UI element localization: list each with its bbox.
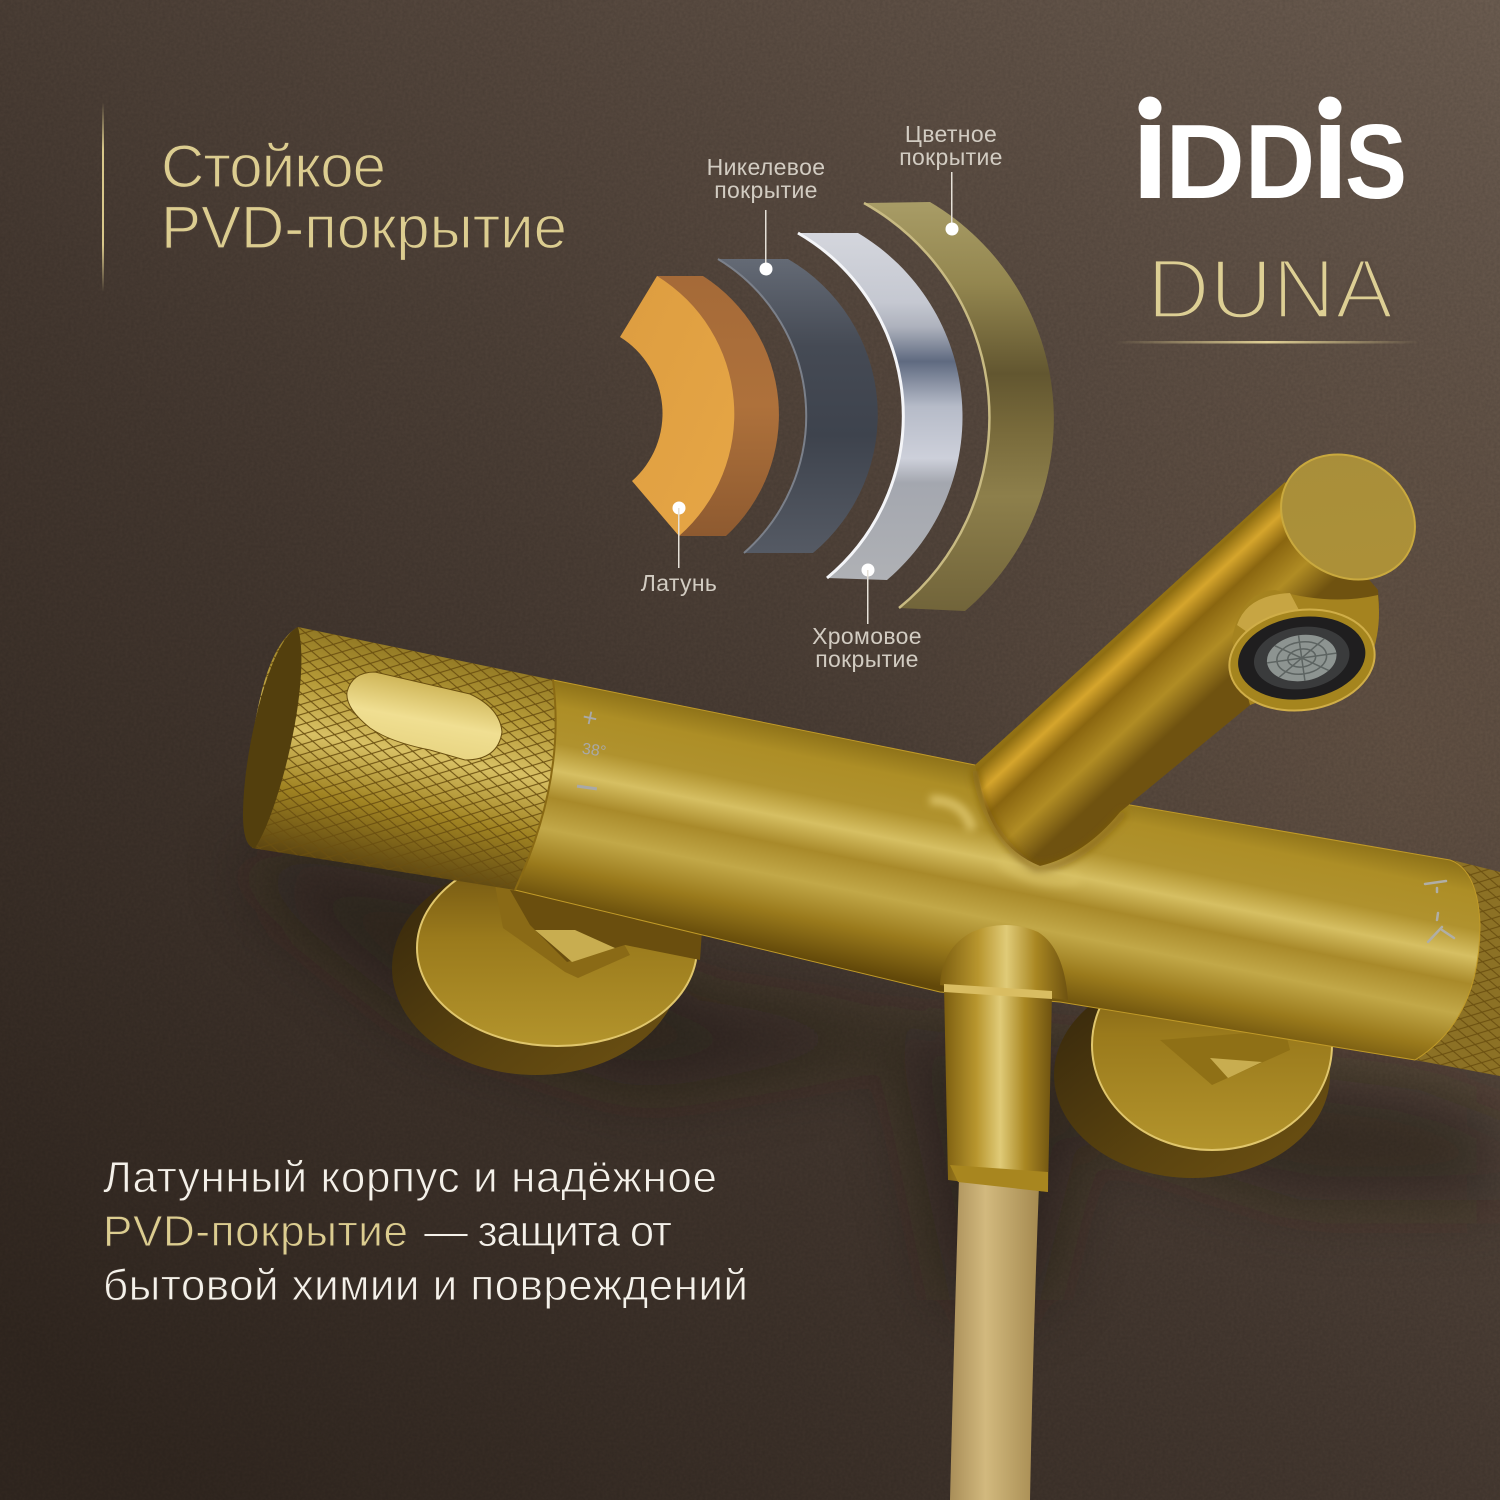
faucet shadows on wall [250,850,1500,1300]
right knurled handle [1416,860,1500,1076]
shower outlet neck [940,925,1068,1000]
layer: chrome coating [798,233,962,580]
label: colour coating: покрытие [899,144,1003,170]
temperature scale [577,701,607,790]
logo: IDDIS: i [1131,73,1170,228]
handle button [347,672,502,760]
bottom description: — защита от [424,1207,672,1256]
bottom description: бытовой химии и повреждений [103,1261,748,1310]
temperature scale: 38° [581,741,607,761]
label: chrome coating [812,564,922,672]
label: colour coating: Цветное [905,121,997,147]
logo: IDDIS: D [1245,103,1315,221]
layer: brass [620,276,779,536]
label: nickel coating: покрытие [714,177,818,203]
label: chrome coating: покрытие [815,646,919,672]
wall mount: right [1054,940,1332,1178]
spout [975,482,1379,866]
diverter icons [1425,881,1454,942]
logo: IDDIS: S [1345,103,1407,221]
bottom description: PVD-покрытие [103,1207,408,1256]
label: nickel coating [707,154,825,276]
body saddle shading [930,770,1125,882]
main body [515,680,1480,1060]
faucet [230,429,1500,1500]
label: nickel coating: Никелевое [707,154,825,180]
decorative vertical line beside title [102,102,104,292]
logo: IDDIS: i [1311,73,1350,228]
underline below series name [1115,341,1420,344]
title: Стойкое [161,133,386,200]
shower hose [950,1178,1039,1500]
title: PVD-покрытие [161,194,567,261]
shower outlet collar [944,984,1052,1192]
bottom description: Латунный корпус и надёжное [103,1153,717,1202]
logo: IDDIS [1138,96,1404,199]
title [161,133,567,261]
label: brass: Латунь [641,570,717,596]
label: colour coating [899,121,1003,236]
series name: DUNA: DUNA [1147,242,1393,336]
layer: colour coating [864,202,1054,611]
bottom description [103,1153,748,1310]
knurled temperature handle [243,627,557,890]
spout cap [1257,429,1439,605]
label: chrome coating: Хромовое [812,623,922,649]
temperature scale: + [580,701,601,734]
layer: nickel coating [718,259,878,553]
wall mount: left [392,850,702,1075]
label: brass [641,502,717,596]
logo: IDDIS: D [1165,103,1245,221]
layered coating diagram [620,121,1054,672]
aerator [1223,600,1381,720]
